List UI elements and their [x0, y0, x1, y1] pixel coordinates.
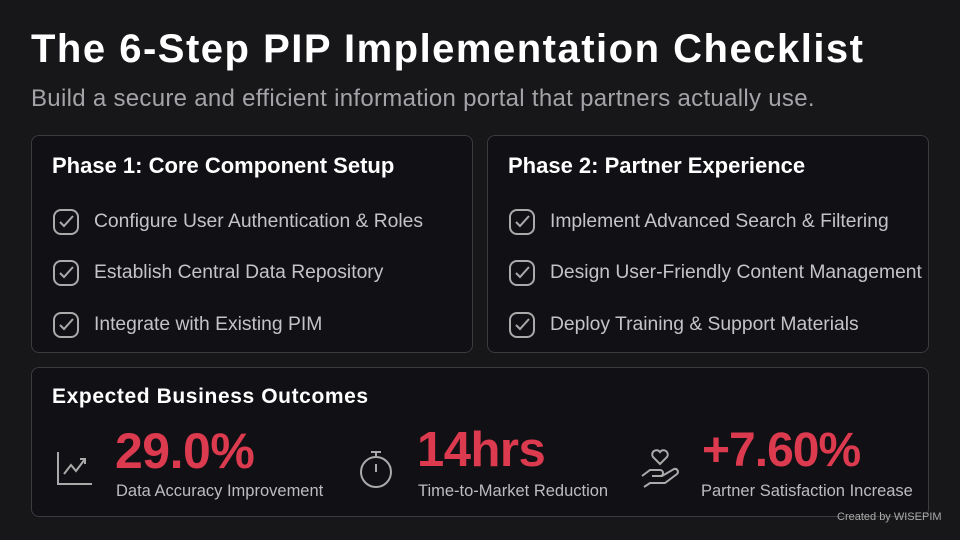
item 1: Configure User Authentication & Roles	[94, 211, 423, 232]
item 5: Design User-Friendly Content Management	[550, 262, 922, 283]
panel: phase 1	[31, 135, 473, 353]
credit: Created by WISEPIM	[837, 511, 942, 523]
item 4: Implement Advanced Search & Filtering	[550, 211, 889, 232]
item 3: Integrate with Existing PIM	[94, 314, 322, 335]
label 1: Data Accuracy Improvement	[116, 482, 323, 500]
title: The 6-Step PIP Implementation Checklist	[31, 27, 864, 71]
item 3	[53, 312, 322, 338]
item 2: Establish Central Data Repository	[94, 262, 383, 283]
heading: outcomes: Expected Business Outcomes	[52, 385, 369, 408]
heading: phase 2: Phase 2: Partner Experience	[508, 153, 805, 178]
heading: phase 1: Phase 1: Core Component Setup	[52, 153, 394, 178]
panel: phase 2	[487, 135, 929, 353]
label 3: Partner Satisfaction Increase	[701, 482, 913, 500]
panel: outcomes	[31, 367, 929, 517]
stat 3: +7.60%	[702, 424, 860, 477]
stat 2: 14hrs	[417, 423, 545, 477]
item 6: Deploy Training & Support Materials	[550, 314, 859, 335]
icon: stopwatch	[360, 451, 392, 488]
subtitle: Build a secure and efficient information portal that partners actually use.	[31, 85, 815, 112]
icon: chart	[57, 452, 92, 485]
icon: heart in hand	[642, 449, 679, 488]
stat 1: 29.0%	[115, 423, 254, 479]
label 2: Time-to-Market Reduction	[418, 482, 608, 500]
